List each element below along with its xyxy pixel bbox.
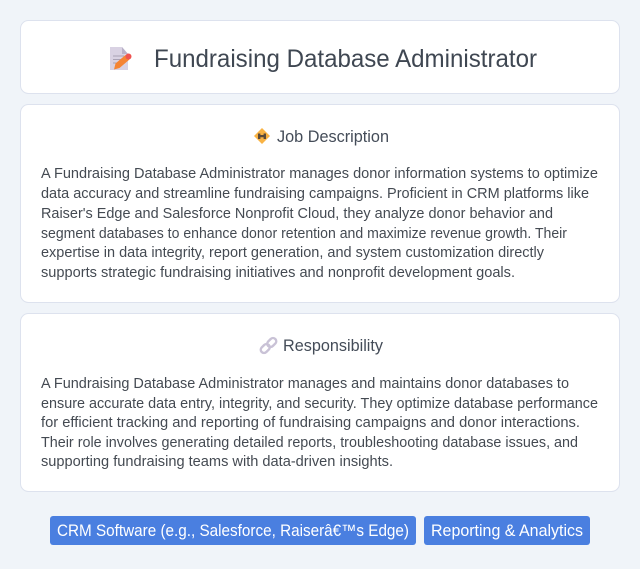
title text: Fundraising Database Administrator [154, 45, 537, 73]
responsibility text: for efficient tracking and reporting of fundraising campaigns and donor interactions. [41, 415, 580, 431]
job description text: expertise in data integrity, report generation, and system customization directly [41, 245, 545, 261]
responsibility text: Their role involves generating detailed reports, troubleshooting database issues, and [41, 435, 578, 451]
panel: job description [20, 104, 620, 302]
heading: responsibility: Responsibility [283, 336, 384, 355]
heading: job description: Job Description [277, 127, 389, 146]
job description text: data accuracy and streamline fundraising campaigns. Proficient in CRM platforms like [41, 186, 589, 202]
panel: responsibility [20, 314, 620, 492]
panel: title [20, 20, 620, 94]
job description text: A Fundraising Database Administrator manages donor information systems to optimize [41, 166, 598, 182]
job description text [41, 166, 598, 281]
tag: reporting and analytics: Reporting & Analytics [431, 522, 583, 540]
job description text: Raiser's Edge and Salesforce Nonprofit Cloud, they analyze donor behavior and [41, 206, 553, 222]
tag: reporting and analytics [424, 516, 590, 545]
icon: document with pencil [110, 47, 132, 70]
responsibility text: supporting fundraising teams with data-driven insights. [41, 454, 393, 470]
responsibility text [41, 376, 598, 470]
job description text: supports strategic fundraising initiatives and nonprofit development goals. [41, 265, 515, 281]
responsibility text: ensure accurate data entry, integrity, and security. They optimize database performance [41, 396, 598, 412]
icon: chain link [259, 337, 278, 354]
job description text: segment databases to enhance donor retention and maximize revenue growth. Their [41, 226, 567, 242]
tag: CRM software: CRM Software (e.g., Salesforce, Raiserâ€™s Edge) [57, 522, 409, 540]
tag: CRM software [50, 516, 416, 545]
responsibility text: A Fundraising Database Administrator manages and maintains donor databases to [41, 376, 569, 392]
icon: diamond [254, 128, 270, 144]
